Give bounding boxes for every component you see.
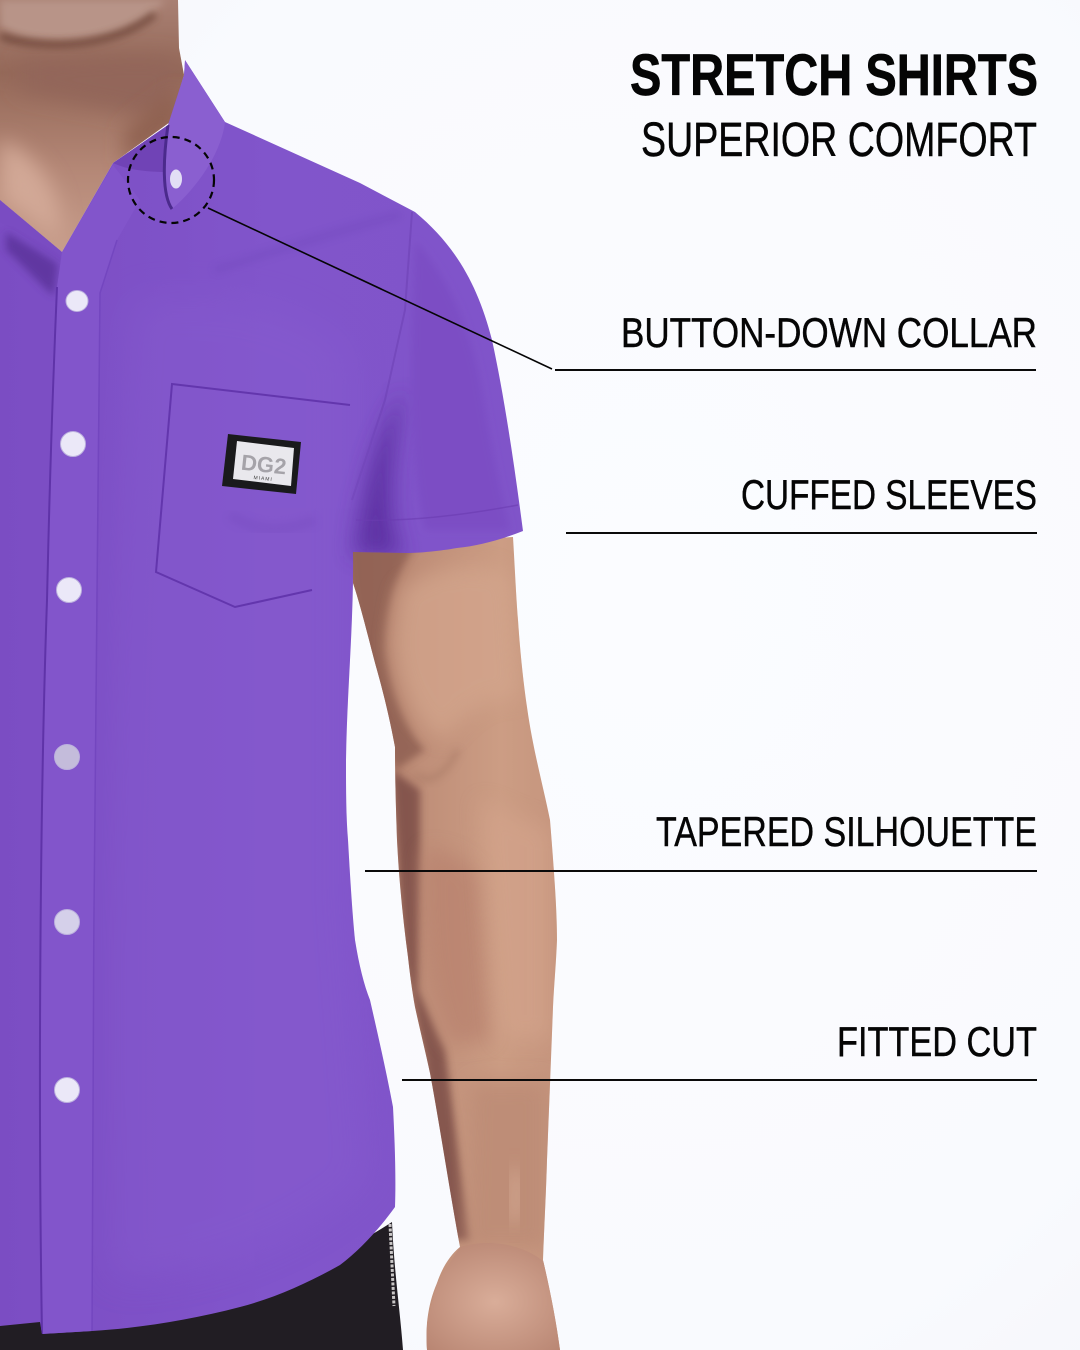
metal logo badge xyxy=(222,434,301,494)
left collar xyxy=(0,200,62,252)
shoulder shadow xyxy=(215,215,400,270)
upper arm shadow xyxy=(353,552,426,770)
metal logo badge: MIAMI xyxy=(253,475,273,483)
sleeve seam xyxy=(375,212,413,428)
collar callout: dashed circle and leader xyxy=(128,137,552,369)
shirt buttons xyxy=(54,290,88,1102)
shirt highlights xyxy=(108,297,370,1280)
collar stand xyxy=(113,125,168,172)
hand xyxy=(425,1243,565,1350)
sleeve shading xyxy=(352,390,405,556)
neck and chin xyxy=(0,0,190,260)
shirt body xyxy=(0,0,540,1350)
arm: skin tone with muscle shading xyxy=(353,537,560,1350)
placket xyxy=(43,238,92,1334)
collar button xyxy=(170,170,182,188)
label: fitted cut: FITTED CUT xyxy=(837,1018,1037,1065)
chest pocket xyxy=(156,384,350,607)
inner forearm shadow xyxy=(392,770,470,1240)
title xyxy=(630,43,1038,167)
upper arm highlight xyxy=(386,572,494,732)
black shorts xyxy=(0,1222,403,1350)
metal logo badge: DG2 xyxy=(240,450,288,479)
elbow crease xyxy=(422,753,458,780)
wrist xyxy=(465,1080,548,1250)
forearm muscle xyxy=(430,856,490,1044)
photo: man wearing purple shirt xyxy=(0,0,570,1350)
cuff stitching xyxy=(396,504,518,520)
